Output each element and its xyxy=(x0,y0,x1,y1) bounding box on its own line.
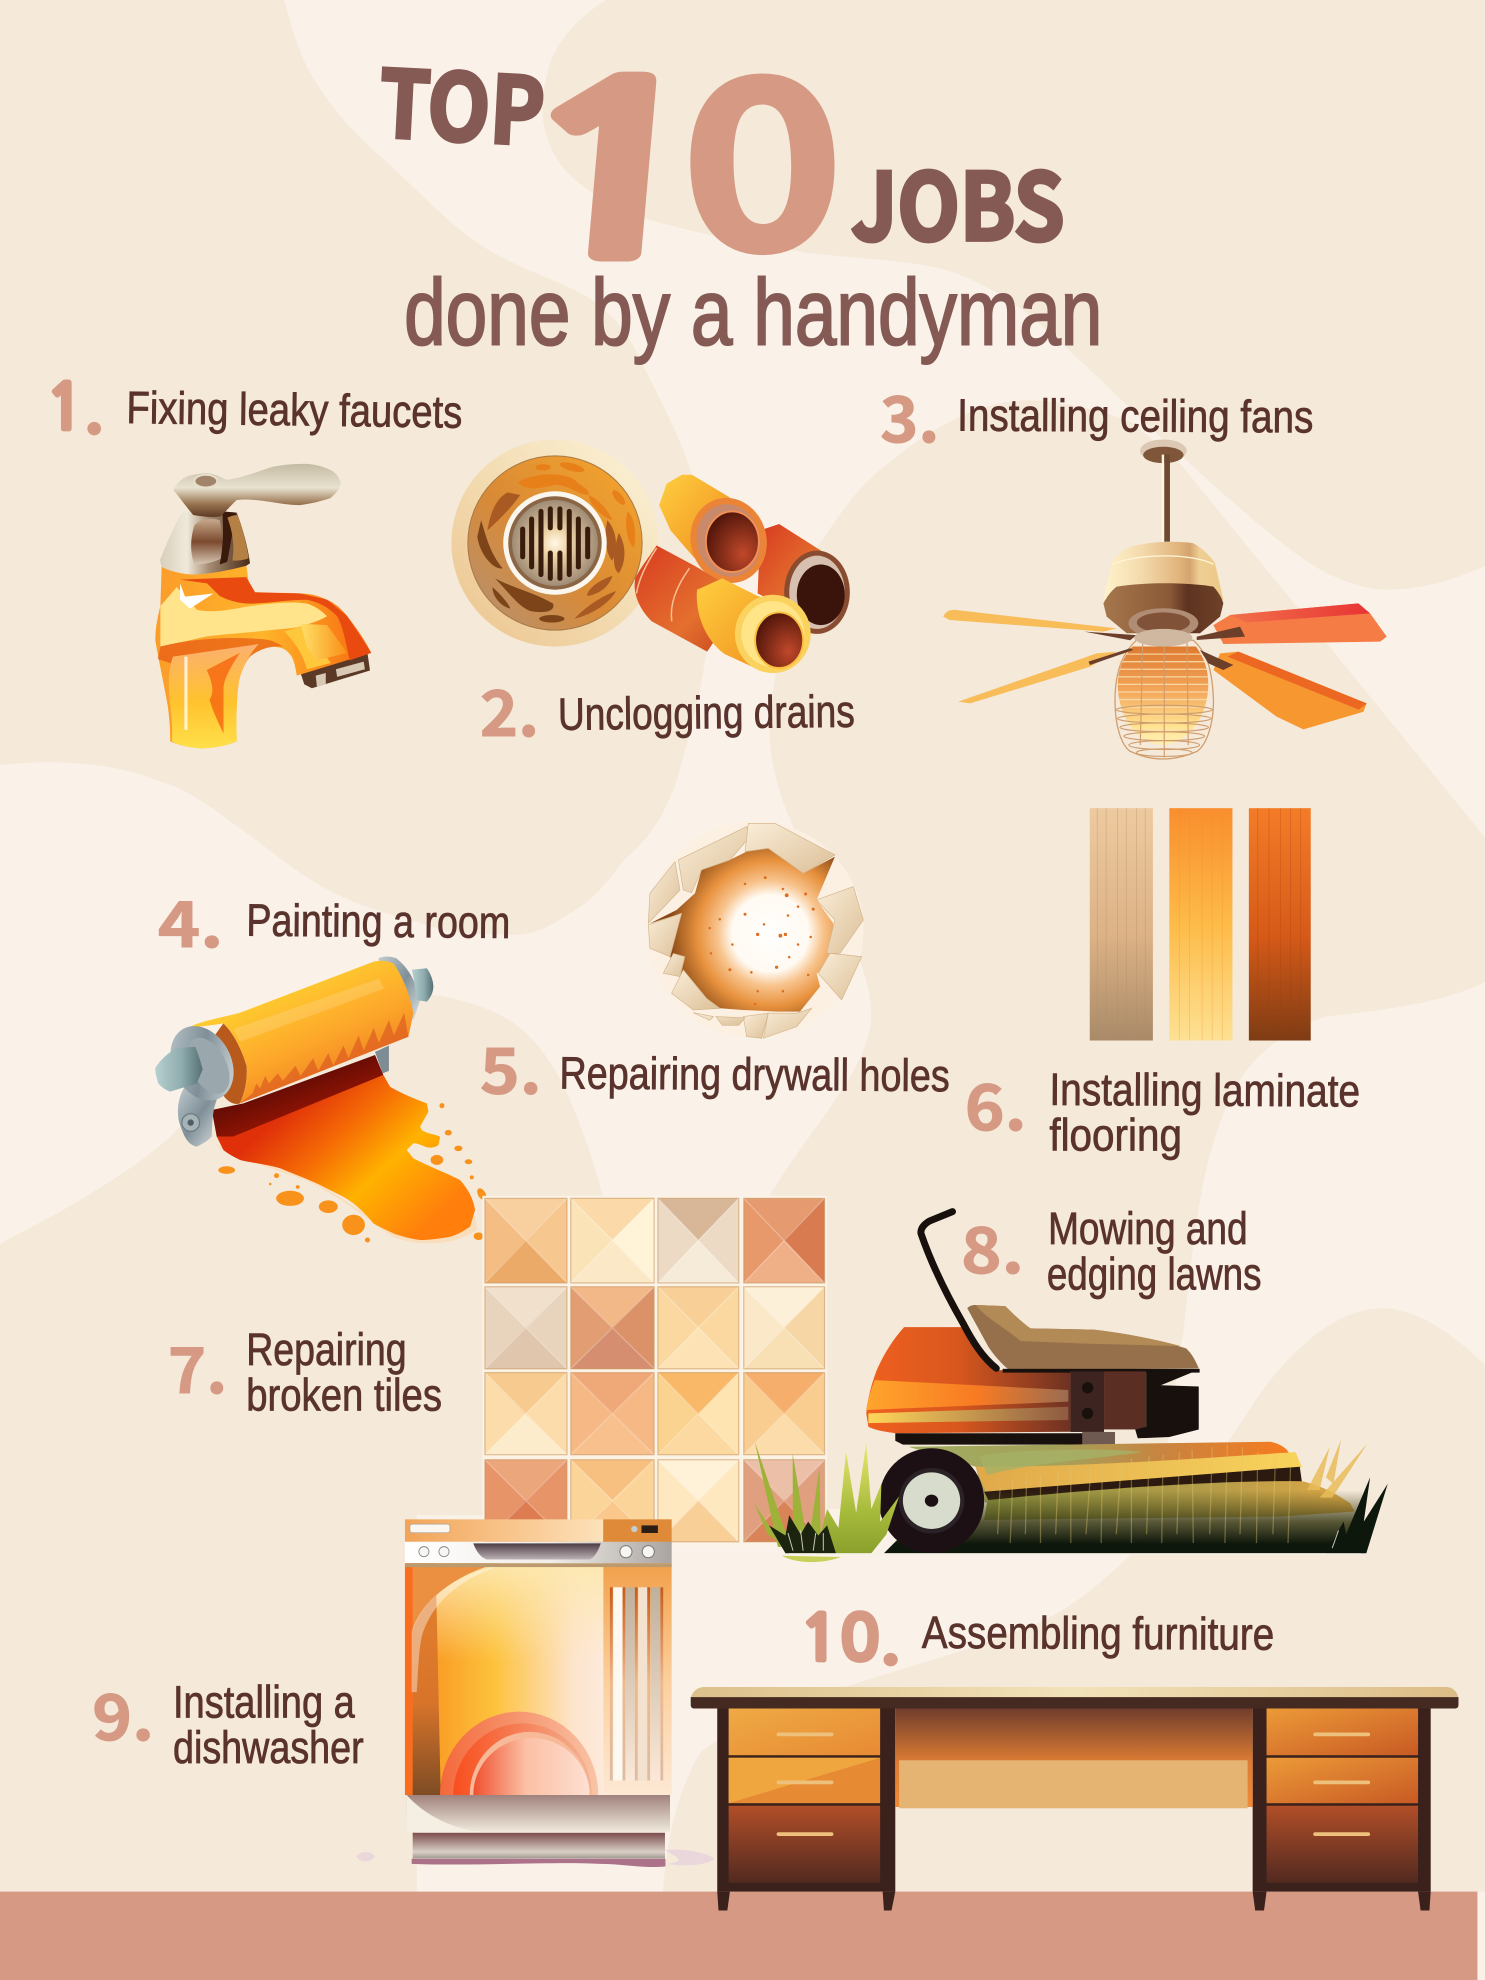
tile row 3 xyxy=(485,1373,825,1455)
number 9: 9. xyxy=(92,1668,154,1759)
tile row 4 xyxy=(485,1460,825,1542)
number 3: 3. xyxy=(880,370,939,461)
item 5: repairing drywall holes xyxy=(480,821,950,1113)
label 7 line 1: Repairing xyxy=(246,1324,407,1375)
label 1: Fixing leaky faucets xyxy=(126,382,463,438)
label 8 line 1: Mowing and xyxy=(1048,1203,1248,1254)
item 7: repairing broken tiles xyxy=(168,1196,827,1546)
item 10: assembling furniture xyxy=(691,1607,1458,1911)
label 4: Painting a room xyxy=(246,895,511,948)
icon: paint roller xyxy=(155,957,488,1244)
item 6: installing laminate flooring xyxy=(965,808,1360,1160)
item 4: painting a room xyxy=(155,875,511,1244)
item 9: installing a dishwasher xyxy=(92,1519,715,1867)
label 8 line 2: edging lawns xyxy=(1047,1248,1261,1299)
label 2: Unclogging drains xyxy=(558,686,855,740)
tile row 2 xyxy=(485,1287,825,1369)
subtitle: done by a handyman xyxy=(404,260,1102,365)
label 6 line 2: flooring xyxy=(1049,1109,1182,1160)
icon: lawn mower xyxy=(754,1212,1388,1562)
label 10: Assembling furniture xyxy=(922,1607,1274,1660)
floor bar xyxy=(0,1892,1477,1980)
tile row 1 xyxy=(485,1198,825,1283)
label 5: Repairing drywall holes xyxy=(559,1047,950,1101)
icon: tile wall xyxy=(482,1196,827,1546)
number 1: 1. xyxy=(45,377,104,439)
title number: 10 xyxy=(499,0,847,320)
label 6 line 1: Installing laminate xyxy=(1049,1064,1360,1117)
item 8: mowing and edging lawns xyxy=(754,1201,1388,1562)
number 6: 6. xyxy=(965,1058,1027,1149)
item 1: fixing leaky faucets xyxy=(45,377,463,748)
label 9 line 1: Installing a xyxy=(173,1676,355,1727)
number 8: 8. xyxy=(961,1201,1024,1292)
title word: jobs: JOBS xyxy=(851,133,1065,267)
title word: top: TOP xyxy=(376,30,548,172)
number 4: 4. xyxy=(158,875,224,966)
icon: drywall hole xyxy=(646,821,864,1038)
title number: 10: 1 xyxy=(499,58,728,291)
label 3: Installing ceiling fans xyxy=(957,390,1313,442)
icon: faucet xyxy=(155,464,371,748)
number 7: 7. xyxy=(168,1321,227,1412)
label 7 line 2: broken tiles xyxy=(246,1369,442,1420)
number 2: 2. xyxy=(480,664,539,755)
icon: ceiling fan xyxy=(943,439,1387,759)
item 2: unclogging drains xyxy=(451,439,855,755)
item 3: installing ceiling fans xyxy=(880,370,1387,759)
icon: desk xyxy=(691,1687,1458,1911)
icon: drain and pipes xyxy=(451,439,850,673)
title xyxy=(376,0,1102,365)
icon: laminate planks xyxy=(1090,808,1311,1041)
number 10: 10. xyxy=(799,1609,900,1671)
icon: dishwasher xyxy=(356,1519,715,1867)
number 5: 5. xyxy=(480,1022,542,1113)
label 9 line 2: dishwasher xyxy=(173,1722,364,1773)
